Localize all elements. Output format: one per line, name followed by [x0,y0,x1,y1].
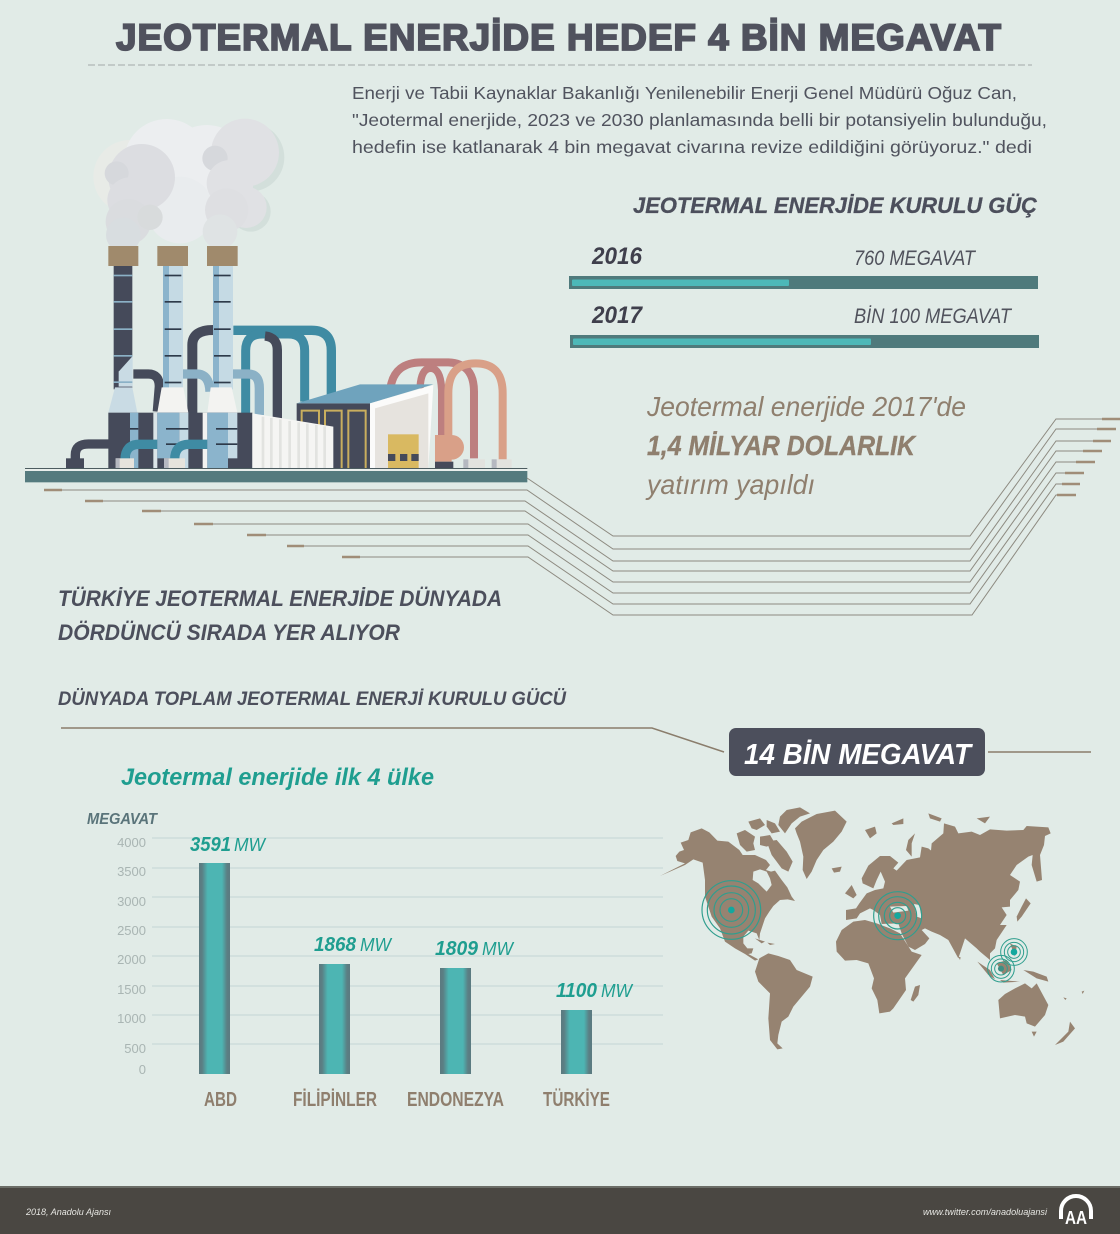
y axis labels: 0 [139,1062,146,1077]
icon: agency logo: AA [1065,1208,1087,1228]
chimney caps [108,246,238,266]
grid lines [152,838,663,1044]
chimneys [108,266,237,413]
bar: Endonezya: 1809 [435,938,479,960]
Americas north and Greenland [660,807,847,961]
bar: Filipinler: FİLİPİNLER [293,1088,377,1111]
illustration: geothermal power plant [25,119,527,482]
credit: 2018, Anadolu Ajansı [25,1207,111,1217]
decorative pipeline lines [44,419,1120,615]
social link: www.twitter.com/anadoluajansi [923,1207,1048,1217]
heading: Turkey ranking: DÖRDÜNCÜ SIRADA YER ALIYOR [58,620,400,645]
bar 2017: 2017 [591,302,644,329]
South America and Africa [755,920,922,1049]
bar 2016: 760 MEGAVAT [854,247,977,270]
bar: Türkiye: 1100 [556,980,597,1002]
marker: Indonesia [988,955,1014,982]
badge: 14 bin megavat: 14 BİN MEGAVAT [744,739,973,771]
bar: ABD: MW [234,835,267,855]
heading: Turkey ranking: TÜRKİYE JEOTERMAL ENERJİDE DÜNYADA [58,586,502,611]
chart heading: Jeotermal enerjide ilk 4 ülke [121,764,434,791]
icon: agency logo [1061,1196,1091,1228]
Australia and islands [911,943,1084,1045]
bar: ABD: ABD [204,1089,237,1111]
smoke clouds [93,119,284,252]
intro paragraph: hedefin ise katlanarak 4 bin megavat civarına revize edildiğini görüyoruz." dedi [352,137,1032,157]
footer [0,1186,1120,1234]
bar: Endonezya: MW [482,939,515,959]
y axis labels: 500 [124,1041,146,1056]
y axis labels: 1500 [117,982,146,997]
y axis labels: 4000 [117,835,146,850]
callout: investment: Jeotermal enerjide 2017'de [646,391,966,422]
callout: investment: 1,4 MİLYAR DOLARLIK [647,430,917,461]
y axis labels: 2500 [117,923,146,938]
lower pipes [66,444,207,468]
bar chart: top 4 countries [87,811,663,1111]
callout: investment: yatırım yapıldı [645,469,815,500]
world map with geothermal markers [660,807,1084,1049]
y axis labels: 3000 [117,894,146,909]
marker: USA [702,881,761,939]
pipes: teal and dark arches [133,330,331,418]
bar 2017 [570,302,1039,348]
bar: Endonezya [407,938,515,1111]
bar: ABD [190,834,267,1111]
bar: ABD: 3591 [190,834,231,856]
ground platform [25,468,527,482]
heading: installed capacity: JEOTERMAL ENERJİDE KURULU GÜÇ [633,193,1038,218]
intro paragraph: Enerji ve Tabii Kaynaklar Bakanlığı Yenilenebilir Enerji Genel Müdürü Oğuz Can, [352,83,1017,103]
bar 2016: 2016 [591,243,643,270]
intro paragraph: "Jeotermal enerjide, 2023 ve 2030 planlamasında belli bir potansiyelin bulunduğu, [352,110,1047,130]
connector lines to badge [61,728,1091,752]
marker: Turkey [874,892,922,940]
white ribbed building [252,413,333,468]
pink and salmon pipes [391,362,512,468]
badge: 14 bin megavat [729,728,985,776]
y axis labels: 2000 [117,952,146,967]
intro paragraph [352,83,1047,157]
Eurasia [845,813,1051,960]
progress bars: installed capacity by year [569,243,1039,348]
callout: investment [645,391,966,500]
main hall [297,384,433,468]
marker: Philippines [1001,939,1027,965]
bar: Türkiye [543,980,634,1111]
bar: Filipinler [293,934,393,1111]
bar: Endonezya: ENDONEZYA [407,1089,504,1111]
bar 2017: BİN 100 MEGAVAT [854,305,1013,328]
y axis labels: 1000 [117,1011,146,1026]
bar: Türkiye: TÜRKİYE [543,1088,610,1111]
bar: Filipinler: 1868 [314,934,357,956]
plant base blocks [108,413,252,468]
bar: Filipinler: MW [360,935,393,955]
bar: Türkiye: MW [601,981,634,1001]
heading: Turkey ranking [58,586,502,645]
y axis labels: 3500 [117,864,146,879]
bar 2016 [569,243,1038,289]
y axis labels [117,835,146,1077]
title: JEOTERMAL ENERJİDE HEDEF 4 BİN MEGAVAT [116,17,1001,58]
heading: world total: DÜNYADA TOPLAM JEOTERMAL ENERJİ KURULU GÜCÜ [58,689,567,710]
y axis title: MEGAVAT [87,811,158,828]
